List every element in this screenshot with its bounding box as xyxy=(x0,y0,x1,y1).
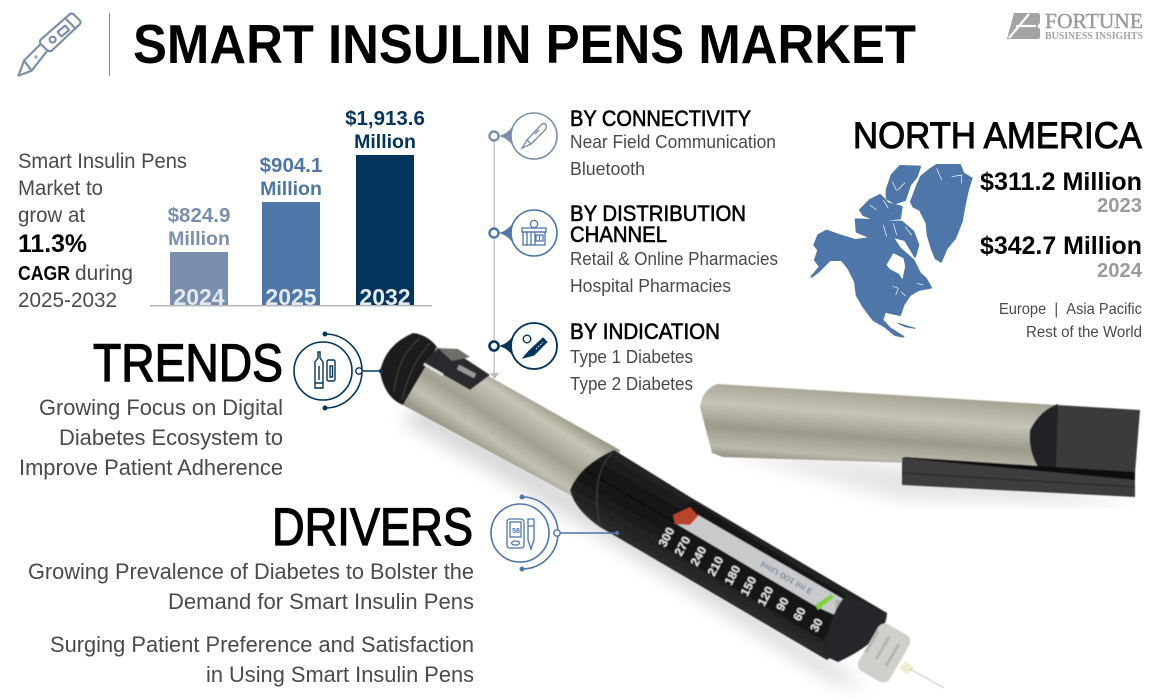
image: smart insulin pen: 180 xyxy=(722,563,743,587)
bar chart xyxy=(150,107,432,310)
drivers text: Surging Patient Preference and Satisfaction xyxy=(50,632,474,657)
regional values: 2023 xyxy=(1097,195,1142,217)
image: smart insulin pen xyxy=(380,333,944,690)
segment text: by distribution channel: CHANNEL xyxy=(570,222,667,247)
drivers text xyxy=(28,559,474,687)
bar chart: 2032 xyxy=(359,284,411,310)
regional values: Rest of the World xyxy=(1026,324,1142,341)
image: smart insulin pen: 210 xyxy=(705,554,726,578)
CAGR text block: Market to xyxy=(18,177,103,200)
CAGR text block: CAGR xyxy=(18,263,70,285)
CAGR text block: grow at xyxy=(18,204,85,227)
map: North America xyxy=(812,165,972,337)
header pen icon xyxy=(18,13,81,76)
trends text: Diabetes Ecosystem to xyxy=(59,425,283,450)
drivers text: Growing Prevalence of Diabetes to Bolster the xyxy=(28,559,474,584)
CAGR text block: during xyxy=(75,262,133,285)
segment text: by distribution channel: BY DISTRIBUTION xyxy=(570,201,746,226)
segment text: by connectivity: BY CONNECTIVITY xyxy=(570,106,751,131)
segment text: by indication xyxy=(570,319,720,394)
icon: drivers xyxy=(491,494,619,572)
CAGR text block: 11.3% xyxy=(18,230,87,258)
trends text: Improve Patient Adherence xyxy=(19,455,283,480)
bar chart: $824.9 xyxy=(168,204,230,227)
CAGR text block: 2025-2032 xyxy=(18,289,117,312)
CAGR text block: Smart Insulin Pens xyxy=(18,150,187,173)
image: smart insulin pen: 240 xyxy=(688,544,709,568)
logo: Fortune Business Insights: FORTUNE xyxy=(1045,9,1143,33)
bar chart: Million xyxy=(354,131,416,153)
bar chart: 2024 xyxy=(173,284,225,310)
bar chart: Million xyxy=(168,228,230,250)
regional values: $342.7 Million xyxy=(980,232,1142,260)
drivers text: Demand for Smart Insulin Pens xyxy=(168,589,474,614)
icon: distribution channel node xyxy=(490,210,557,256)
image: smart insulin pen: 60 xyxy=(790,605,809,623)
segment text: by indication: Type 2 Diabetes xyxy=(570,373,693,394)
trends text: Growing Focus on Digital xyxy=(39,395,283,420)
timeline arrow tip xyxy=(490,373,499,379)
icon: drivers: 58 xyxy=(512,528,520,535)
title: SMART INSULIN PENS MARKET xyxy=(133,13,916,75)
region heading: NORTH AMERICA xyxy=(853,114,1142,156)
logo: Fortune Business Insights: BUSINESS INSIGHTS xyxy=(1045,30,1143,42)
drivers heading: DRIVERS xyxy=(272,498,473,557)
regional values xyxy=(980,168,1143,341)
segment text: by connectivity: Near Field Communication xyxy=(570,131,776,152)
icon: connectivity node xyxy=(490,113,557,159)
CAGR text block xyxy=(18,150,187,312)
image: smart insulin pen: 270 xyxy=(672,534,693,558)
segment text: by indication: Type 1 Diabetes xyxy=(570,346,693,367)
header divider xyxy=(109,13,110,76)
trends text xyxy=(19,395,283,480)
segment text: by connectivity xyxy=(570,106,776,179)
image: smart insulin pen: 90 xyxy=(773,595,792,613)
image: smart insulin pen: 30 xyxy=(807,616,826,634)
image: smart insulin pen: 300 xyxy=(656,525,677,549)
regional values: $311.2 Million xyxy=(980,168,1142,196)
bar chart: $904.1 xyxy=(260,154,322,177)
segment text: by indication: BY INDICATION xyxy=(570,319,720,344)
segment text: by distribution channel: Retail & Online Pharmacies xyxy=(570,248,778,269)
segment text: by distribution channel: Hospital Pharmacies xyxy=(570,275,731,296)
icon: indication node xyxy=(490,323,557,369)
regional values: 2024 xyxy=(1097,260,1143,282)
icon: trends xyxy=(294,332,383,410)
vertical timeline connector xyxy=(494,136,495,376)
logo: Fortune Business Insights xyxy=(1007,9,1143,42)
image: detached silver pen cap xyxy=(700,384,1140,505)
image: smart insulin pen: 150 xyxy=(738,574,759,598)
bar chart: 2025 xyxy=(265,284,317,310)
image: smart insulin pen: 3 ml 100 U/ml xyxy=(759,559,814,596)
bar chart: $1,913.6 xyxy=(345,107,425,130)
bar chart: Million xyxy=(260,178,322,200)
segment text: by distribution channel xyxy=(570,201,778,296)
segment text: by connectivity: Bluetooth xyxy=(570,158,645,179)
image: smart insulin pen: 120 xyxy=(755,584,776,608)
regional values: Europe | Asia Pacific xyxy=(999,301,1142,318)
trends heading: TRENDS xyxy=(93,334,283,393)
drivers text: in Using Smart Insulin Pens xyxy=(206,662,474,687)
